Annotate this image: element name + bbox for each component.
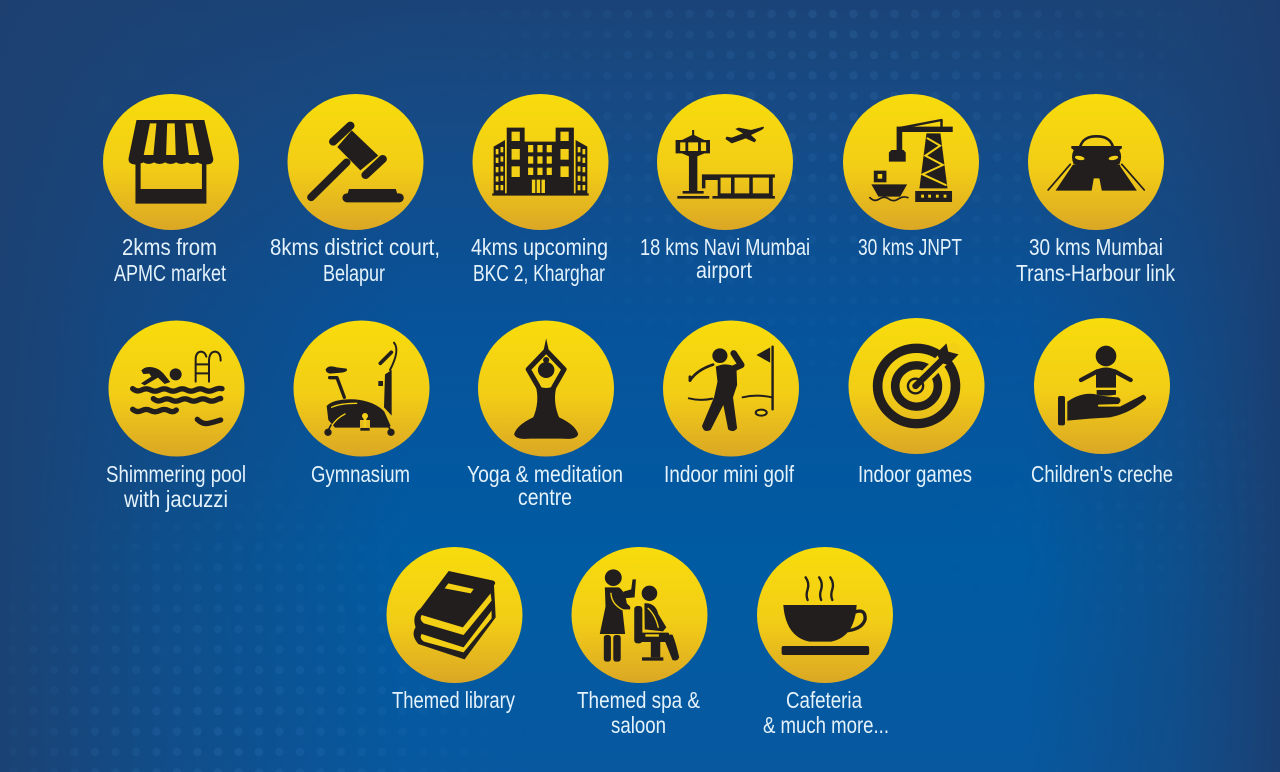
label	[270, 234, 440, 286]
icon: target with arrow	[848, 318, 984, 454]
label	[640, 234, 810, 283]
icon: stacked books	[386, 547, 522, 683]
item: BKC 2	[471, 94, 608, 286]
icon: meditating figure	[478, 320, 614, 456]
label: Themed spa &	[577, 687, 700, 713]
label	[106, 461, 246, 512]
label: centre	[518, 484, 572, 510]
icon: child on open hand	[1034, 318, 1170, 454]
item: library	[386, 547, 522, 713]
label	[577, 687, 700, 738]
label: Cafeteria	[786, 687, 863, 713]
label: 4kms upcoming	[471, 234, 608, 260]
label: saloon	[611, 712, 666, 738]
item: JNPT	[843, 94, 979, 260]
item: APMC market	[103, 94, 239, 286]
icon: steaming cup	[757, 547, 893, 683]
item: golf	[663, 320, 799, 487]
icon: port crane and ship	[843, 94, 979, 230]
item: indoor games	[848, 318, 984, 487]
label	[467, 461, 623, 510]
label: Themed library	[392, 687, 515, 713]
icon: stylist and client	[572, 547, 708, 683]
label: 8kms district court,	[270, 234, 440, 260]
label: with jacuzzi	[123, 486, 228, 512]
label: Children's creche	[1031, 461, 1173, 487]
label: APMC market	[114, 260, 226, 286]
label: 30 kms JNPT	[858, 234, 962, 260]
label: Shimmering pool	[106, 461, 246, 487]
icon: golfer and flag	[663, 320, 799, 456]
item: cafeteria	[757, 547, 893, 738]
label	[471, 234, 608, 286]
label: 2kms from	[122, 234, 217, 260]
label: Indoor mini golf	[664, 461, 794, 487]
icon: airport	[657, 94, 793, 230]
item: Trans-Harbour link	[1016, 94, 1175, 286]
item: gymnasium	[294, 320, 430, 487]
icon: office buildings	[472, 94, 608, 230]
label: BKC 2, Kharghar	[473, 260, 605, 286]
item: pool	[106, 320, 246, 512]
item: spa and saloon	[572, 547, 708, 738]
label: & much more...	[763, 712, 889, 738]
label: Trans-Harbour link	[1016, 260, 1175, 286]
label	[1016, 234, 1175, 286]
item: creche	[1031, 318, 1173, 487]
label: Belapur	[323, 260, 385, 286]
icon: exercise bike	[294, 320, 430, 456]
icon: swimmer and pool ladder	[108, 320, 244, 456]
item: airport	[640, 94, 810, 283]
icon: market stall	[103, 94, 239, 230]
label: Indoor games	[858, 461, 972, 487]
item: district court	[270, 94, 440, 286]
label: 30 kms Mumbai	[1029, 234, 1163, 260]
label	[114, 234, 226, 286]
label: Yoga & meditation	[467, 461, 623, 487]
label: 18 kms Navi Mumbai	[640, 234, 810, 260]
label: Gymnasium	[311, 461, 410, 487]
icon: gavel	[288, 94, 424, 230]
label: airport	[696, 257, 752, 283]
item: yoga	[467, 320, 623, 510]
label	[763, 687, 889, 738]
icon: car on road	[1028, 94, 1164, 230]
